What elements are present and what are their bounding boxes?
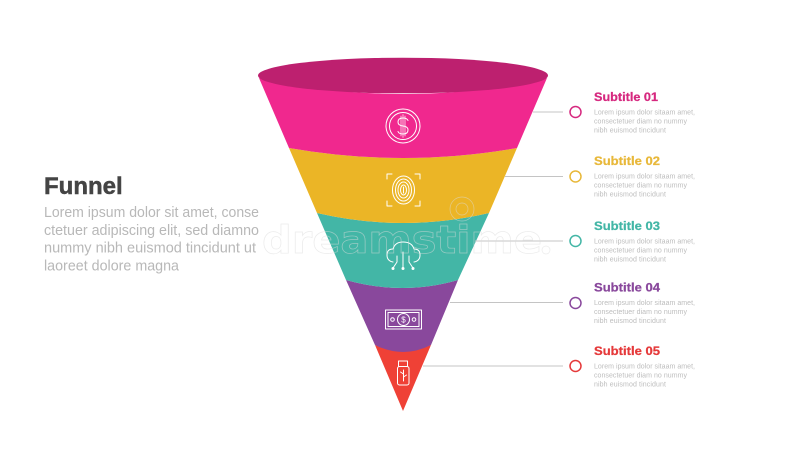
marker 05 — [570, 360, 581, 372]
subtitle 04: Subtitle 04 — [594, 282, 661, 294]
left description text: laoreet dolore magna — [44, 258, 180, 274]
funnel — [258, 58, 548, 411]
description 02 — [594, 174, 695, 198]
description 05: consectetuer diam no nummy — [594, 372, 688, 380]
funnel band 5: red tip — [375, 345, 431, 411]
watermark: dreamstime — [262, 218, 542, 262]
subtitle 05: Subtitle 05 — [594, 346, 661, 358]
item 01 — [570, 92, 695, 134]
funnel band 2: yellow — [289, 148, 517, 223]
funnel band 3: teal — [317, 213, 489, 288]
subtitle 02: Subtitle 02 — [594, 156, 660, 168]
description 01 — [594, 110, 695, 134]
item 05 — [570, 346, 695, 388]
funnel band 1: pink — [259, 78, 547, 158]
connector lines — [423, 112, 563, 366]
description 02: nibh euismod tincidunt — [594, 192, 666, 198]
description 03: nibh euismod tincidunt — [594, 256, 666, 264]
description 01: consectetuer diam no nummy — [594, 118, 688, 126]
funnel top opening — [258, 58, 548, 93]
description 03 — [594, 238, 695, 264]
item 03 — [570, 221, 695, 264]
item 02 — [570, 156, 695, 198]
description 04: nibh euismod tincidunt — [594, 318, 666, 325]
description 05: nibh euismod tincidunt — [594, 382, 666, 388]
left description text — [44, 205, 259, 274]
subtitle 01: Subtitle 01 — [594, 92, 659, 104]
marker 01 — [570, 106, 581, 118]
description 03: Lorem ipsum dolor sitaam amet, — [594, 238, 695, 246]
marker 03 — [570, 236, 581, 246]
description 01: Lorem ipsum dolor sitaam amet, — [594, 110, 695, 116]
subtitle 03: Subtitle 03 — [594, 221, 660, 233]
description 01: nibh euismod tincidunt — [594, 128, 666, 134]
left description text: nummy nibh euismod tincidunt ut — [44, 240, 256, 256]
description 02: Lorem ipsum dolor sitaam amet, — [594, 174, 695, 180]
description 04 — [594, 300, 695, 325]
icon: dollar coin — [386, 109, 420, 143]
description 05 — [594, 364, 695, 388]
icon: banknote: $ — [401, 316, 406, 324]
marker 02 — [570, 171, 581, 182]
description 02: consectetuer diam no nummy — [594, 182, 688, 190]
description 03: consectetuer diam no nummy — [594, 248, 688, 254]
icon: banknote — [386, 310, 422, 329]
marker 04 — [570, 298, 581, 308]
description 04: consectetuer diam no nummy — [594, 309, 688, 316]
left description text: Lorem ipsum dolor sit amet, conse — [44, 205, 259, 221]
icon: fingerprint — [387, 174, 420, 206]
description 04: Lorem ipsum dolor sitaam amet, — [594, 300, 695, 307]
description 05: Lorem ipsum dolor sitaam amet, — [594, 364, 695, 370]
watermark — [262, 197, 550, 262]
icon: cloud network — [387, 242, 420, 270]
item 04 — [570, 282, 695, 325]
heading: Funnel: Funnel — [44, 173, 123, 200]
left description text: ctetuer adipiscing elit, sed diamno — [44, 223, 259, 239]
funnel band 4: purple — [346, 280, 458, 352]
icon: usb drive — [398, 361, 409, 385]
